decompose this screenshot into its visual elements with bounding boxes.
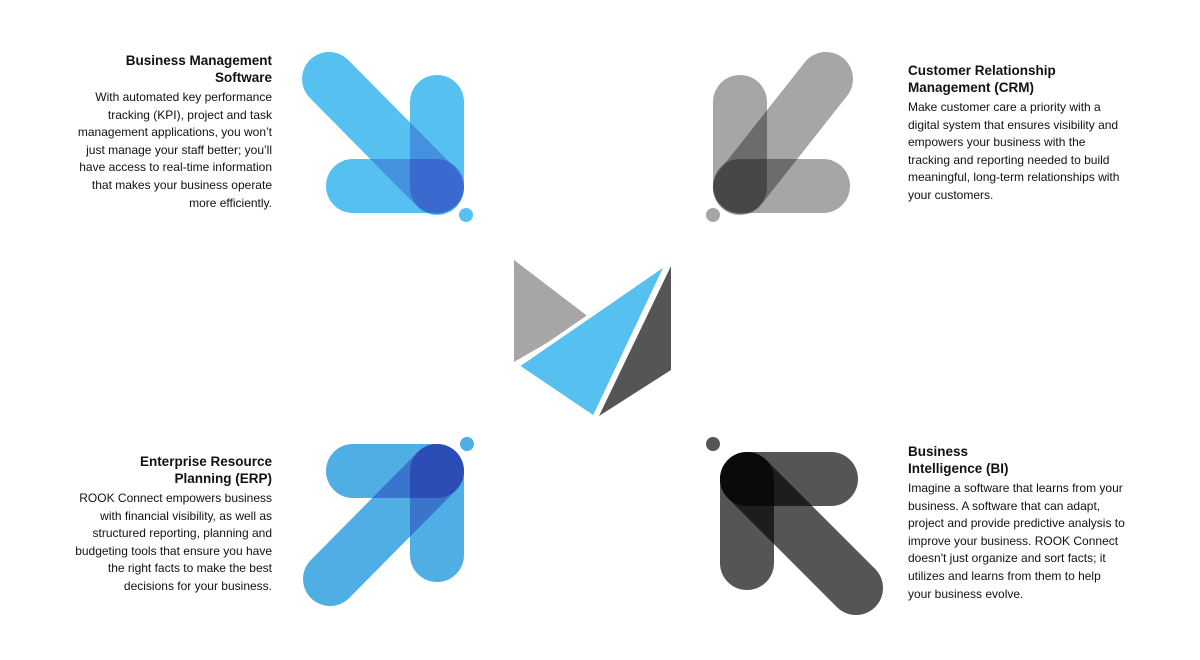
text block: ERP: ROOK Connect empowers business — [79, 491, 272, 505]
icon: gray down-left arrow — [706, 79, 826, 222]
text block: ERP: Enterprise Resource — [140, 454, 272, 469]
text block: BI: Intelligence (BI) — [908, 461, 1009, 476]
text block: CRM: tracking and reporting needed to build — [908, 153, 1109, 167]
logo: center triangles — [514, 260, 671, 418]
text block: ERP — [75, 454, 272, 593]
text block: Business Management Software: more efficiently. — [189, 196, 272, 210]
text block: CRM: meaningful, long-term relationships with — [908, 170, 1119, 184]
text block: ERP: Planning (ERP) — [174, 471, 272, 486]
text block: ERP: the right facts to make the best — [108, 561, 272, 575]
text block: CRM: digital system that ensures visibility and — [908, 118, 1118, 132]
text block: CRM: empowers your business with the — [908, 135, 1085, 149]
text block: Business Management Software: Software — [215, 70, 272, 85]
text block: ERP: with financial visibility, as well as — [100, 509, 272, 523]
text block: ERP: decisions for your business. — [124, 579, 272, 593]
text block: BI: utilizes and learns from them to help — [908, 569, 1101, 583]
text block: BI: improve your business. ROOK Connect — [908, 534, 1118, 548]
text block: CRM: Customer Relationship — [908, 63, 1056, 78]
text block: BI: your business evolve. — [908, 587, 1023, 601]
text block: CRM — [908, 63, 1119, 202]
text block: Business Management Software: Business Management — [126, 53, 272, 68]
text block: Business Management Software: just manage your staff better; you’ll — [86, 143, 272, 157]
text block: Business Management Software: management applications, you won’t — [78, 125, 272, 139]
icon: blue up-right arrow — [303, 437, 474, 606]
text block: ERP: structured reporting, planning and — [93, 526, 272, 540]
text block: Business Management Software: have access to real-time information — [79, 160, 272, 174]
text block: CRM: Management (CRM) — [908, 80, 1034, 95]
icons and logo — [302, 52, 883, 615]
icon: blue down-right arrow — [302, 52, 473, 222]
text block: Business Management Software: tracking (KPI), project and task — [108, 108, 272, 122]
text block: BI: project and provide predictive analysis to — [908, 516, 1125, 530]
text block: CRM: your customers. — [908, 188, 993, 202]
text block: BI: Imagine a software that learns from your — [908, 481, 1123, 495]
text block: BI — [908, 444, 1125, 601]
icon: dark gray up-left arrow — [706, 437, 856, 588]
text block: Business Management Software: that makes your business operate — [92, 178, 272, 192]
text block: ERP: budgeting tools that ensure you have — [75, 544, 272, 558]
text block: BI: business. A software that can adapt, — [908, 499, 1100, 513]
text block: BI: Business — [908, 444, 968, 459]
text block: Business Management Software: With automated key performance — [95, 90, 272, 104]
text block: Business Management Software — [78, 53, 272, 210]
text block: CRM: Make customer care a priority with a — [908, 100, 1101, 114]
text block: BI: doesn't just organize and sort facts; it — [908, 551, 1106, 565]
